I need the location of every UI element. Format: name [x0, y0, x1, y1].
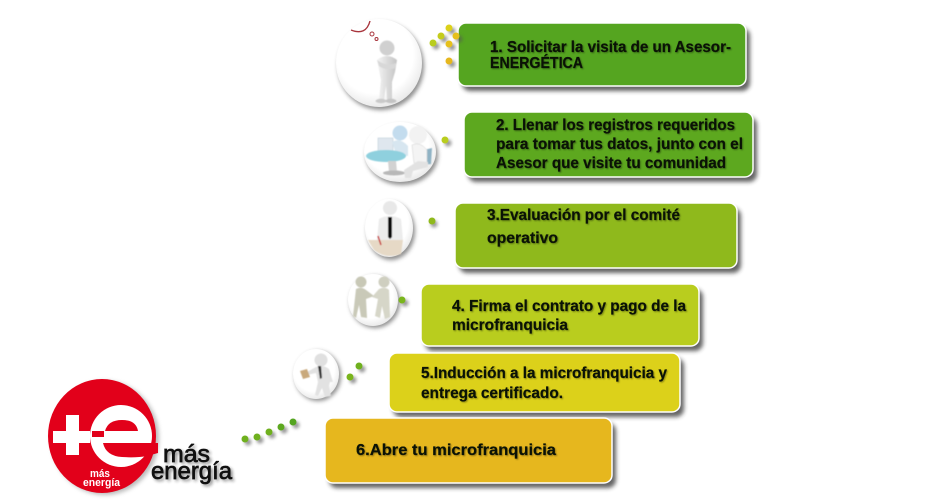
step 3 box: 3.Evaluación por el comité: [487, 207, 680, 224]
logo: más energía: energía: [83, 477, 121, 489]
dots: step 5 connector: [346, 362, 366, 384]
dots: logo connector: [242, 418, 300, 446]
logo: más energía: energía: [151, 458, 233, 485]
step 1 box: 1. Solicitar la visita de un Asesor-: [490, 39, 731, 56]
step 6 box: [325, 418, 616, 488]
logo: más energía: más: [163, 441, 210, 468]
icon: thinking figure: [336, 19, 424, 110]
dot: step 3 connector: [428, 218, 438, 228]
logo: más energía: más: [165, 443, 212, 470]
logo: más energía: energía: [153, 460, 235, 487]
icon: man signing at desk: [365, 199, 415, 260]
step 5 box: [389, 353, 684, 417]
logo: más energía: más: [90, 468, 110, 480]
dot: step 2 connector: [442, 136, 452, 146]
icon: man with document: [293, 349, 341, 401]
step 2 box: Asesor que visite tu comunidad: [496, 155, 726, 172]
icon: meeting at table: [364, 122, 438, 185]
step 1 box: ENERGÉTICA: [490, 53, 583, 72]
step 5 box: entrega certificado.: [421, 385, 563, 402]
step 4 box: [421, 284, 703, 351]
step 2 box: 2. Llenar los registros requeridos: [496, 117, 735, 134]
dot: step 4 connector: [398, 296, 408, 306]
step 2 box: [464, 112, 757, 182]
step 4 box: 4. Firma el contrato y pago de la: [452, 298, 686, 315]
step 3 box: [455, 203, 741, 273]
logo: más energía: [48, 379, 235, 495]
step 3 box: operativo: [487, 230, 558, 247]
dots: step 1 connector: [430, 24, 462, 68]
step 5 box: 5.Inducción a la microfranquicia y: [421, 365, 667, 382]
icon: handshake: [348, 274, 400, 328]
step 4 box: microfranquicia: [452, 317, 568, 334]
step 1 box: [458, 23, 750, 91]
step 6 box: 6.Abre tu microfranquicia: [356, 442, 556, 459]
step 2 box: para tomar tus datos, junto con el: [496, 136, 743, 153]
